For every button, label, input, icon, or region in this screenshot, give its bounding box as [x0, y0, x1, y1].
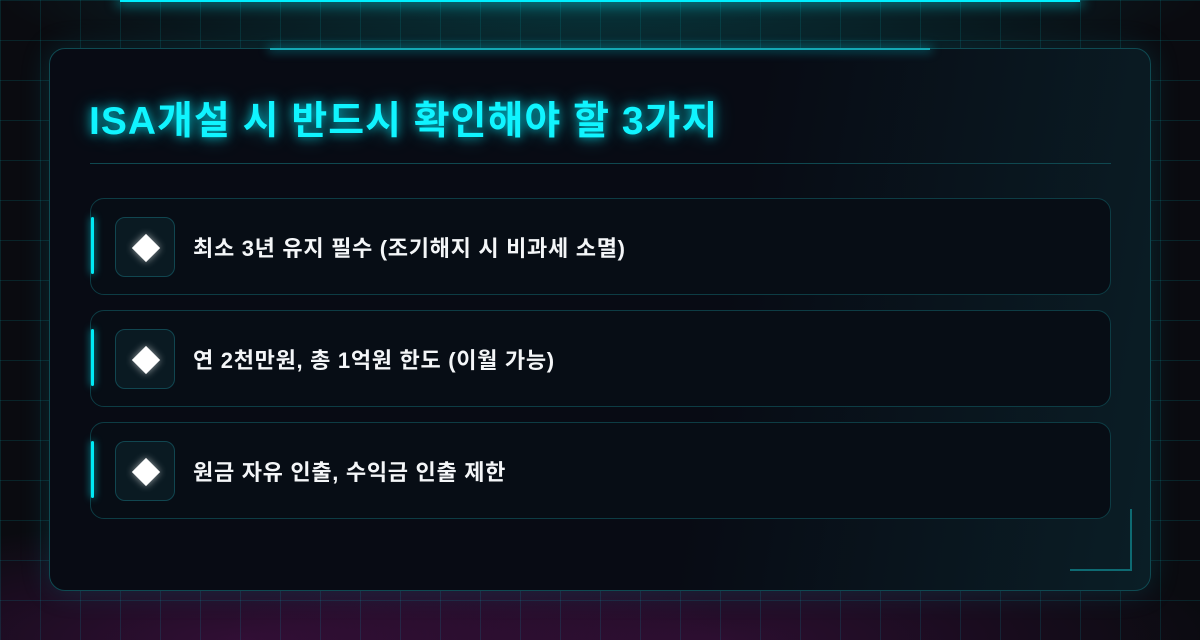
item 1 — [90, 198, 1111, 295]
item 2 — [90, 310, 1111, 407]
text 3: 원금 자유 인출, 수익금 인출 제한 — [193, 460, 506, 485]
icon: diamond — [115, 441, 175, 501]
item 3 — [90, 422, 1111, 519]
panel: main card — [49, 48, 1151, 591]
top glow line — [120, 0, 1080, 2]
text 1: 최소 3년 유지 필수 (조기해지 시 비과세 소멸) — [193, 236, 626, 261]
text 2: 연 2천만원, 총 1억원 한도 (이월 가능) — [193, 348, 555, 373]
corner bracket — [1130, 509, 1132, 571]
icon: diamond — [115, 329, 175, 389]
title: ISA개설 시 반드시 확인해야 할 3가지 — [89, 100, 718, 143]
icon: diamond — [115, 217, 175, 277]
